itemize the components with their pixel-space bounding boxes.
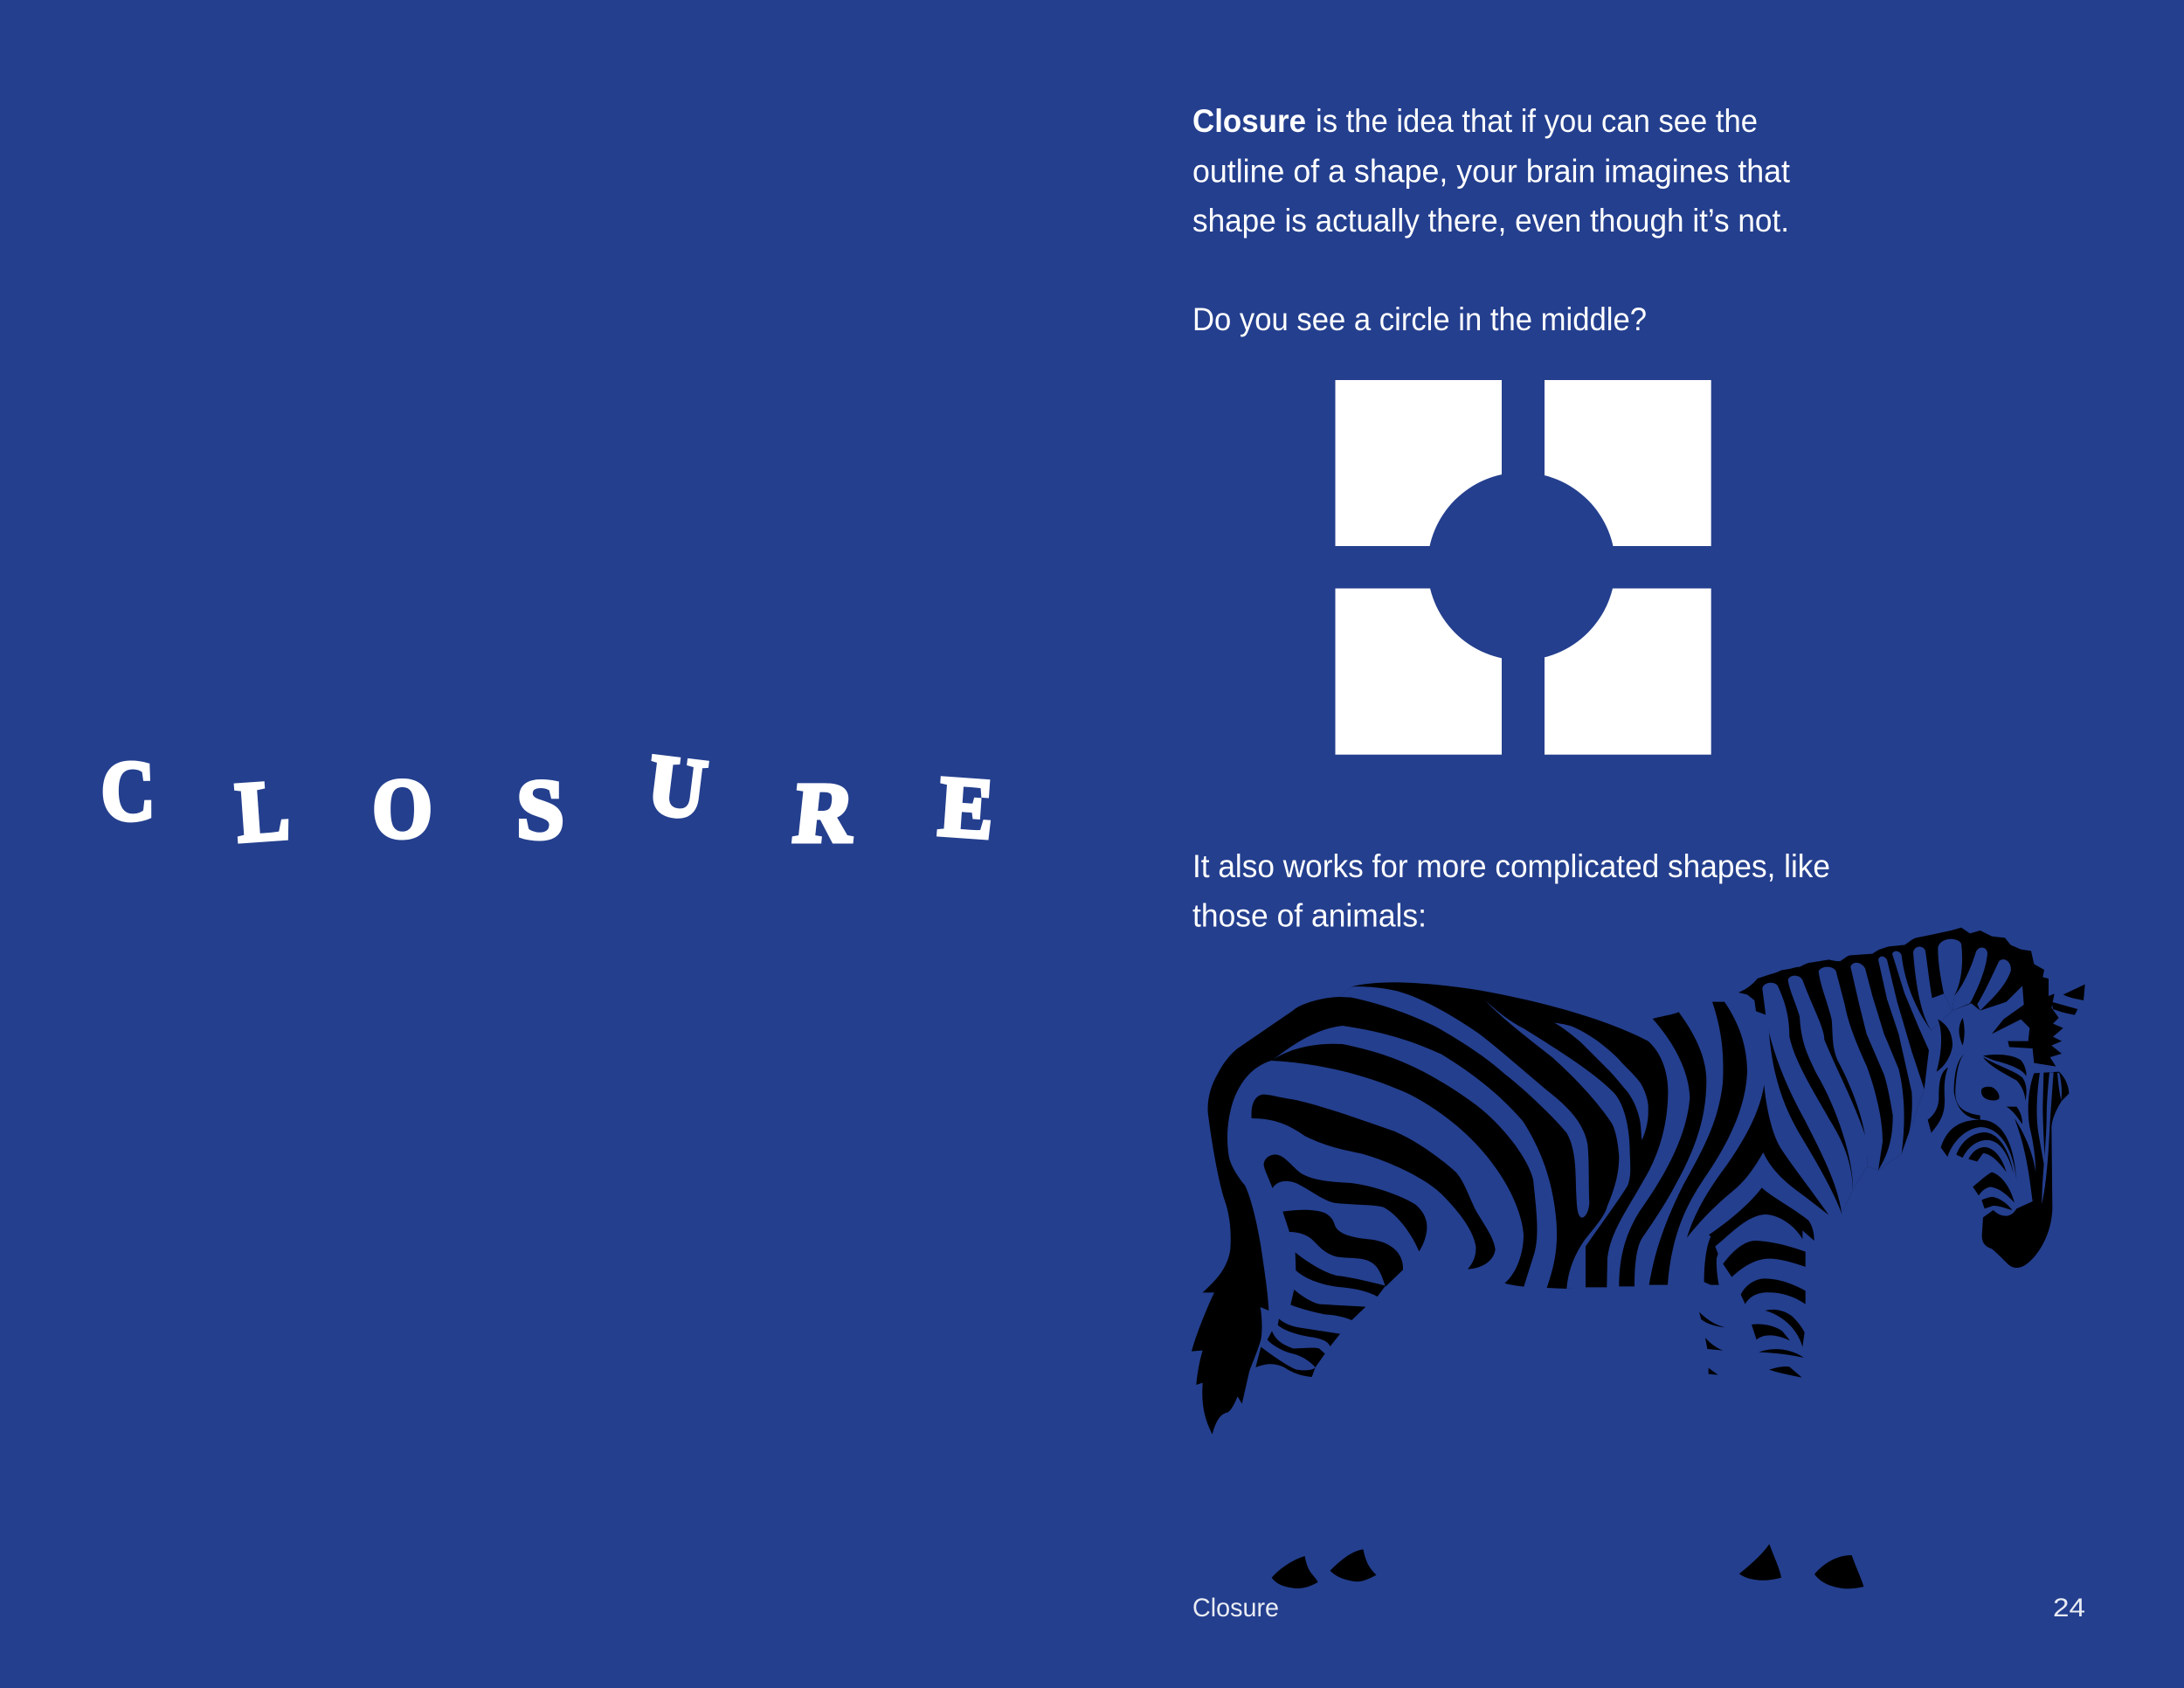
second paragraph: [1192, 848, 1830, 933]
question text: Do you see a circle in the middle?: [1192, 301, 1647, 337]
illusion: four squares implying a circle: [1335, 380, 1711, 755]
intro paragraph: shape is actually there, even though it’s not.: [1192, 203, 1789, 239]
title: scattered letters: E: [936, 758, 997, 857]
footer section label: Closure: [1192, 1594, 1279, 1622]
title: scattered letters: L: [233, 763, 293, 861]
intro paragraph: outline of a shape, your brain imagines that: [1192, 154, 1791, 189]
zebra hooves: [1272, 1544, 1863, 1588]
intro paragraph: Closure: [1192, 103, 1306, 139]
zebra illustration: [1192, 928, 2085, 1435]
title: scattered letters: U: [643, 737, 711, 838]
second paragraph: It also works for more complicated shapes, like: [1192, 848, 1830, 884]
title: scattered letters: O: [372, 762, 432, 856]
intro paragraph: is the idea that if you can see the: [1316, 103, 1758, 139]
intro paragraph: [1192, 103, 1791, 239]
second paragraph: those of animals:: [1192, 898, 1427, 933]
title: scattered letters: S: [516, 763, 564, 857]
title: scattered letters: [100, 737, 997, 861]
title: scattered letters: R: [790, 765, 860, 860]
footer page number: 24: [2053, 1594, 2085, 1622]
title: scattered letters: C: [100, 743, 156, 839]
